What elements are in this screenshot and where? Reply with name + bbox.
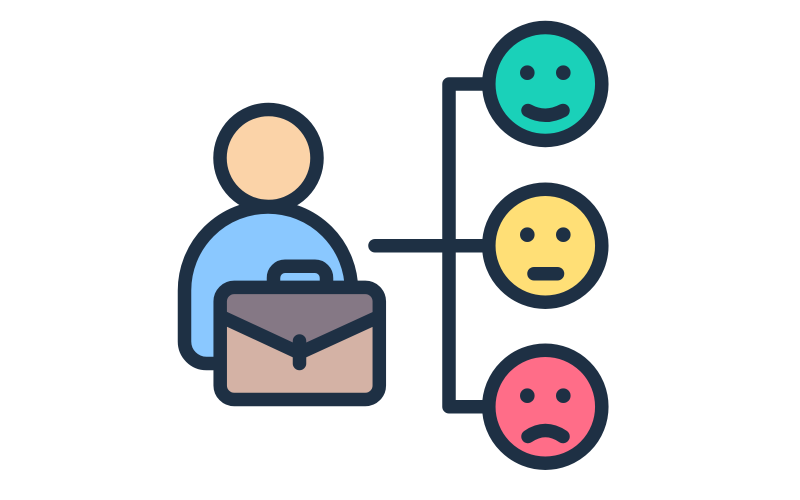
icon: neutral face	[489, 189, 602, 302]
icon: sad face	[489, 350, 602, 463]
briefcase handle	[273, 266, 327, 290]
icon: happy face	[489, 28, 602, 140]
icon: person	[184, 110, 352, 364]
briefcase outline and flap line	[220, 287, 379, 400]
briefcase flap	[227, 294, 373, 353]
icon: briefcase	[220, 266, 379, 400]
person body	[184, 207, 352, 364]
briefcase lower body	[220, 287, 379, 400]
person head	[220, 110, 317, 206]
connector tree	[375, 84, 490, 407]
